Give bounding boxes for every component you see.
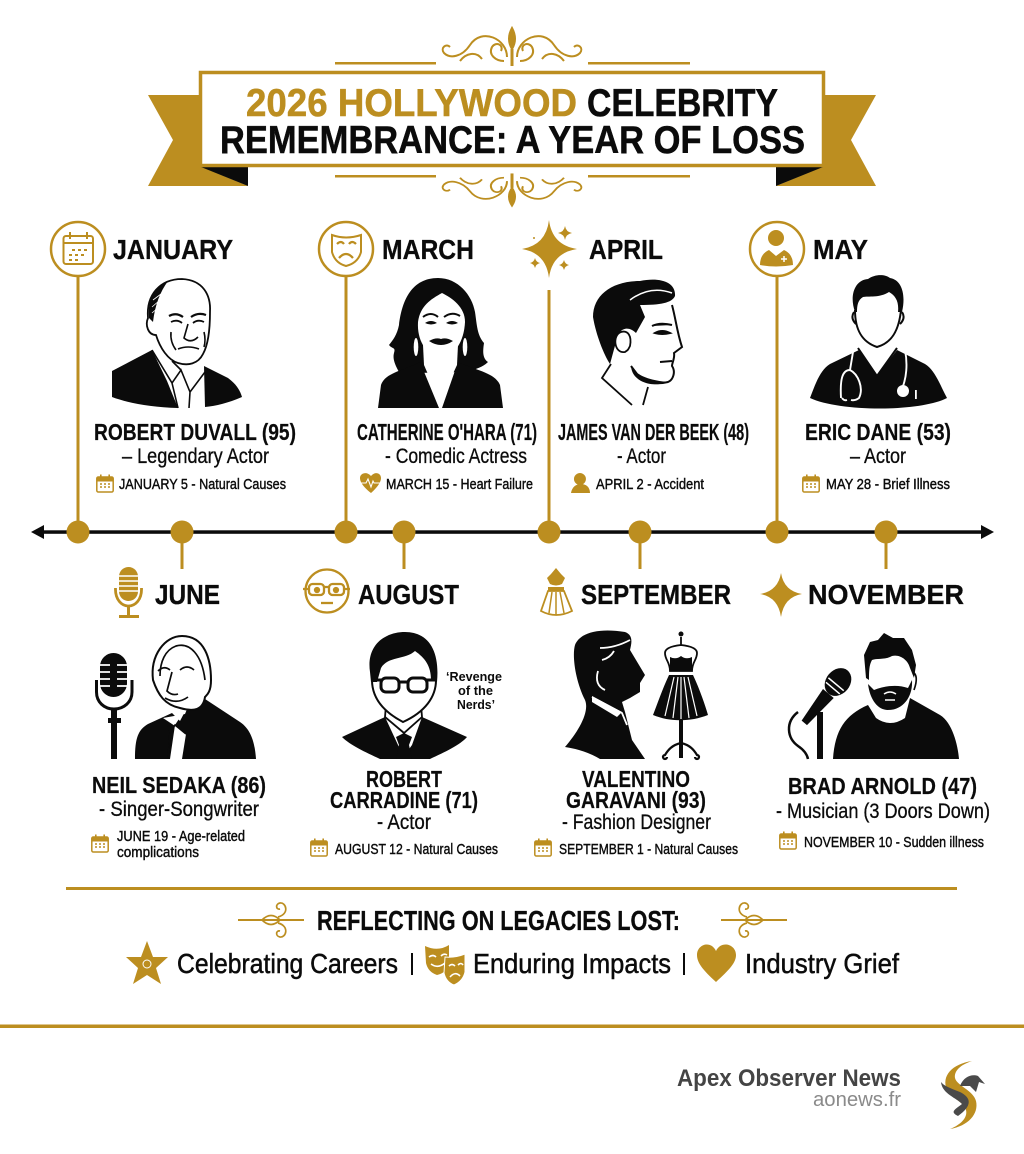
name and role: - Musician (3 Doors Down) <box>776 800 990 823</box>
separator <box>411 953 413 975</box>
name and role: ROBERT DUVALL (95) <box>94 419 296 445</box>
date line <box>535 838 738 858</box>
name and role: ERIC DANE (53) <box>805 419 951 445</box>
name and role: - Singer-Songwriter <box>99 798 259 821</box>
date line: MARCH 15 - Heart Failure <box>386 477 533 493</box>
month heading: JANUARY <box>113 234 233 265</box>
month heading: APRIL <box>589 234 663 265</box>
ornament left <box>238 903 304 937</box>
footer brand <box>677 1061 985 1129</box>
name and role: - Actor <box>617 445 666 468</box>
name and role: - Comedic Actress <box>385 445 527 468</box>
icon: doctor <box>750 222 804 276</box>
panel: September <box>535 568 738 858</box>
name and role: - Actor <box>377 811 431 834</box>
date line: APRIL 2 - Accident <box>596 477 704 493</box>
month heading: MARCH <box>382 234 474 265</box>
brand url: aonews.fr <box>813 1089 901 1111</box>
name and role <box>562 766 711 834</box>
name and role: – Actor <box>850 445 906 468</box>
title banner <box>148 28 876 206</box>
name and role: JAMES VAN DER BEEK (48) <box>558 419 749 445</box>
item text: Industry Grief <box>745 948 899 979</box>
portrait: Robert Duvall <box>112 279 242 408</box>
name and role <box>776 773 990 823</box>
date line <box>803 474 950 493</box>
panel: June <box>92 567 266 861</box>
name and role <box>94 419 296 468</box>
date line <box>92 829 245 861</box>
date line <box>571 473 704 493</box>
icon: star <box>760 573 802 617</box>
title text: REMEMBRANCE: A YEAR OF LOSS <box>220 119 805 162</box>
title text: CELEBRITY <box>587 82 778 125</box>
icon: sparkle stars <box>522 220 577 278</box>
icon: calendar <box>51 222 105 276</box>
month heading: MAY <box>813 234 868 265</box>
item text: Celebrating Careers <box>177 948 398 979</box>
name and role <box>92 772 266 821</box>
date line: JANUARY 5 - Natural Causes <box>119 477 286 493</box>
panel: May <box>750 222 951 493</box>
date line: MAY 28 - Brief Illness <box>826 477 950 493</box>
date line: SEPTEMBER 1 - Natural Causes <box>559 842 738 858</box>
month heading: JUNE <box>155 579 220 610</box>
quote text: of the <box>458 683 493 698</box>
portrait: James Van Der Beek <box>593 280 682 405</box>
item text: Enduring Impacts <box>473 948 671 979</box>
portrait: Eric Dane <box>810 275 947 408</box>
ribbon fold left <box>201 167 248 186</box>
panel: April <box>522 220 749 493</box>
date line: complications <box>117 845 199 861</box>
title text: 2026 HOLLYWOOD <box>246 82 577 125</box>
panel: August <box>303 570 502 858</box>
icon: heart <box>697 944 736 982</box>
separator <box>683 953 685 975</box>
month heading: AUGUST <box>358 579 459 610</box>
quote text <box>446 669 502 712</box>
ribbon left <box>148 95 248 186</box>
title text <box>220 82 805 162</box>
name and role: GARAVANI (93) <box>566 787 706 813</box>
timeline axis <box>31 275 994 569</box>
month heading: NOVEMBER <box>808 579 964 610</box>
icon: dress <box>541 568 572 615</box>
panel: January <box>51 222 296 493</box>
date line: JUNE 19 - Age-related <box>117 829 245 845</box>
name and role <box>330 766 478 834</box>
ribbon right <box>776 95 876 186</box>
name and role <box>805 419 951 468</box>
legacies section <box>126 903 899 985</box>
top ornament <box>335 28 690 66</box>
name and role: NEIL SEDAKA (86) <box>92 772 266 798</box>
panel: November <box>760 573 990 851</box>
icon: theatre mask <box>319 222 373 276</box>
date line <box>97 474 286 493</box>
title box <box>200 72 824 166</box>
portrait: Catherine O'Hara <box>378 278 503 408</box>
date line <box>360 473 533 493</box>
panel: March <box>319 222 537 493</box>
name and role <box>558 419 749 468</box>
portrait: Robert Carradine <box>342 632 502 759</box>
icon: microphone <box>115 567 142 618</box>
ornament right <box>721 903 787 937</box>
date line: NOVEMBER 10 - Sudden illness <box>804 835 984 851</box>
name and role: BRAD ARNOLD (47) <box>788 773 977 799</box>
quote text: Nerds’ <box>457 697 495 712</box>
name and role <box>357 419 537 468</box>
icon: star <box>126 941 168 984</box>
name and role: VALENTINO <box>582 766 690 792</box>
portrait: Brad Arnold <box>789 633 959 759</box>
name and role: - Fashion Designer <box>562 811 711 834</box>
quote text: ‘Revenge <box>446 669 502 684</box>
name and role: CATHERINE O'HARA (71) <box>357 419 537 445</box>
heading: REFLECTING ON LEGACIES LOST: <box>317 905 680 936</box>
portrait: Valentino Garavani <box>565 631 708 759</box>
bottom ornament <box>335 171 690 206</box>
date line <box>311 838 498 858</box>
date line <box>780 832 984 851</box>
icon: face with glasses <box>303 570 350 612</box>
date line: AUGUST 12 - Natural Causes <box>335 842 498 858</box>
ribbon fold right <box>776 167 823 186</box>
portrait: Neil Sedaka <box>96 636 256 759</box>
footer rule <box>0 1024 1024 1028</box>
name and role: CARRADINE (71) <box>330 787 478 813</box>
divider line <box>66 887 957 890</box>
name and role: – Legendary Actor <box>122 445 269 468</box>
name and role: ROBERT <box>366 766 442 792</box>
brand name: Apex Observer News <box>677 1065 901 1092</box>
icon: comedy and tragedy masks <box>425 945 465 985</box>
logo <box>941 1061 985 1129</box>
month heading: SEPTEMBER <box>581 579 731 610</box>
